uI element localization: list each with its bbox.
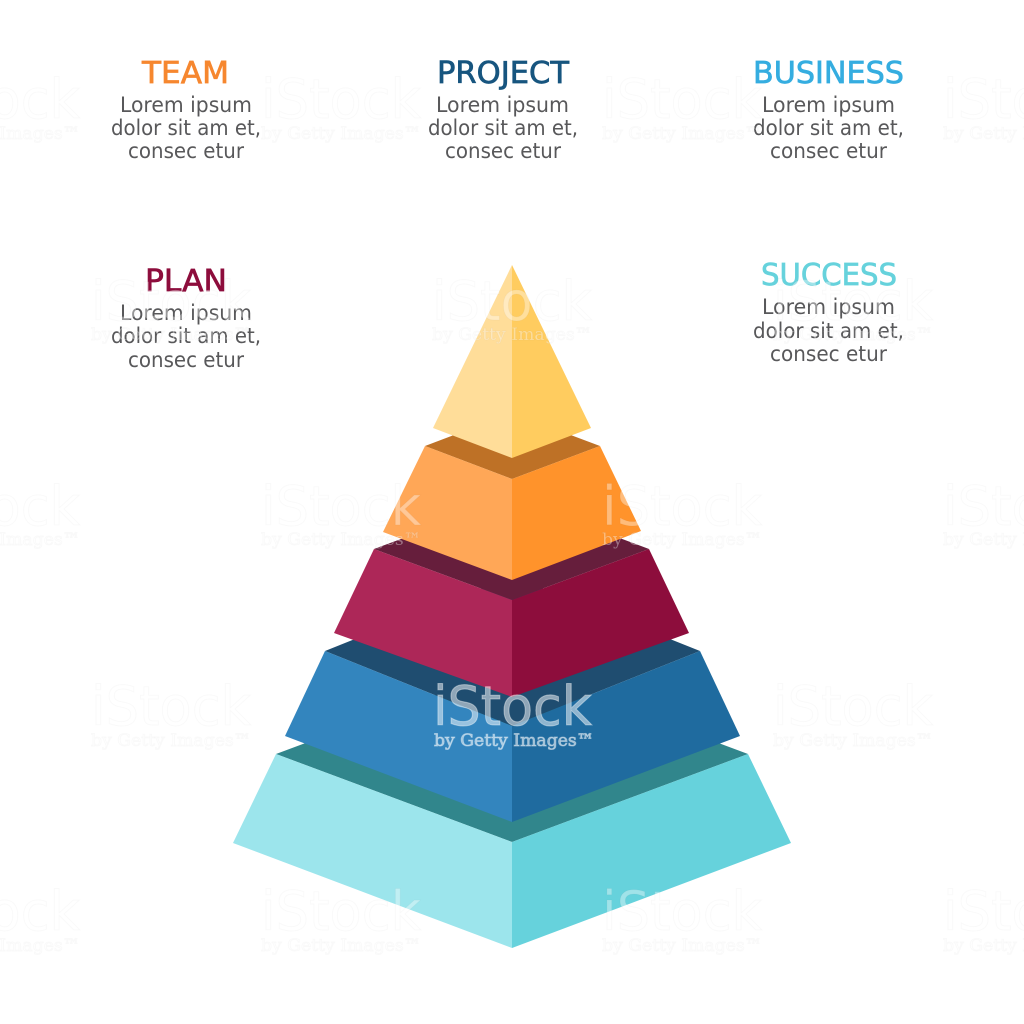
watermark tiles: by Getty Images™	[602, 124, 762, 144]
text block: plan: Lorem ipsum	[120, 301, 252, 325]
text block: team: TEAM	[141, 56, 229, 91]
layer: crimson	[334, 498, 689, 697]
text block: project: PROJECT	[437, 56, 570, 91]
text block: success: Lorem ipsum	[762, 295, 895, 319]
text block: project	[428, 56, 578, 163]
watermark tiles: iStock	[773, 675, 934, 738]
watermark tiles: by Getty Images™	[602, 530, 762, 550]
watermark tiles: iStock	[602, 475, 763, 538]
text block: business: consec etur	[770, 139, 887, 163]
watermark tiles: iStock	[602, 880, 763, 943]
text block: team	[111, 56, 261, 163]
watermark tiles: by Getty Images™	[91, 731, 251, 751]
watermark tiles: iStock	[602, 68, 763, 131]
watermark tiles: iStock	[261, 880, 422, 943]
central watermark: iStock	[433, 675, 593, 738]
text block: success: dolor sit am et,	[753, 319, 904, 343]
watermark tiles: by Getty Images™	[91, 325, 251, 345]
text block: success: SUCCESS	[761, 258, 897, 293]
text block: plan: PLAN	[145, 264, 227, 299]
watermark tiles: iStock	[91, 675, 252, 738]
watermark tiles: by Getty Images™	[773, 325, 933, 345]
text block: business: BUSINESS	[753, 56, 904, 91]
layer: yellow apex	[433, 265, 591, 458]
text block: business: dolor sit am et,	[753, 116, 904, 140]
watermark tiles: by Getty Images™	[432, 325, 592, 345]
watermark tiles: iStock	[261, 68, 422, 131]
text block: plan: dolor sit am et,	[111, 324, 261, 348]
watermark tiles: iStock	[773, 270, 934, 333]
watermark tiles: by Getty Images™	[261, 936, 421, 956]
watermark tiles: iStock	[91, 270, 252, 333]
text block: plan: consec etur	[128, 348, 244, 372]
text block: project: consec etur	[445, 139, 561, 163]
text block: business	[753, 56, 904, 163]
watermark tiles: iStock	[432, 270, 593, 333]
watermark tiles: by Getty Images™	[602, 936, 762, 956]
text block: business: Lorem ipsum	[762, 93, 895, 117]
watermark tiles: by Getty Images™	[261, 124, 421, 144]
text block: team: Lorem ipsum	[120, 93, 252, 117]
layer: blue	[285, 576, 740, 822]
layer: orange	[383, 413, 641, 580]
text block: project: dolor sit am et,	[428, 116, 578, 140]
text block: team: dolor sit am et,	[111, 116, 261, 140]
layer: teal base	[233, 666, 791, 948]
pyramid chart	[233, 265, 791, 948]
text block: success: consec etur	[770, 342, 887, 366]
central watermark: by Getty Images™	[434, 731, 594, 751]
text block: team: consec etur	[128, 139, 244, 163]
text block: success	[753, 258, 904, 366]
watermark tiles: iStock	[261, 475, 422, 538]
watermark tiles: by Getty Images™	[261, 530, 421, 550]
watermark tiles: by Getty Images™	[773, 731, 933, 751]
text block: project: Lorem ipsum	[436, 93, 569, 117]
text block: plan	[111, 264, 261, 372]
